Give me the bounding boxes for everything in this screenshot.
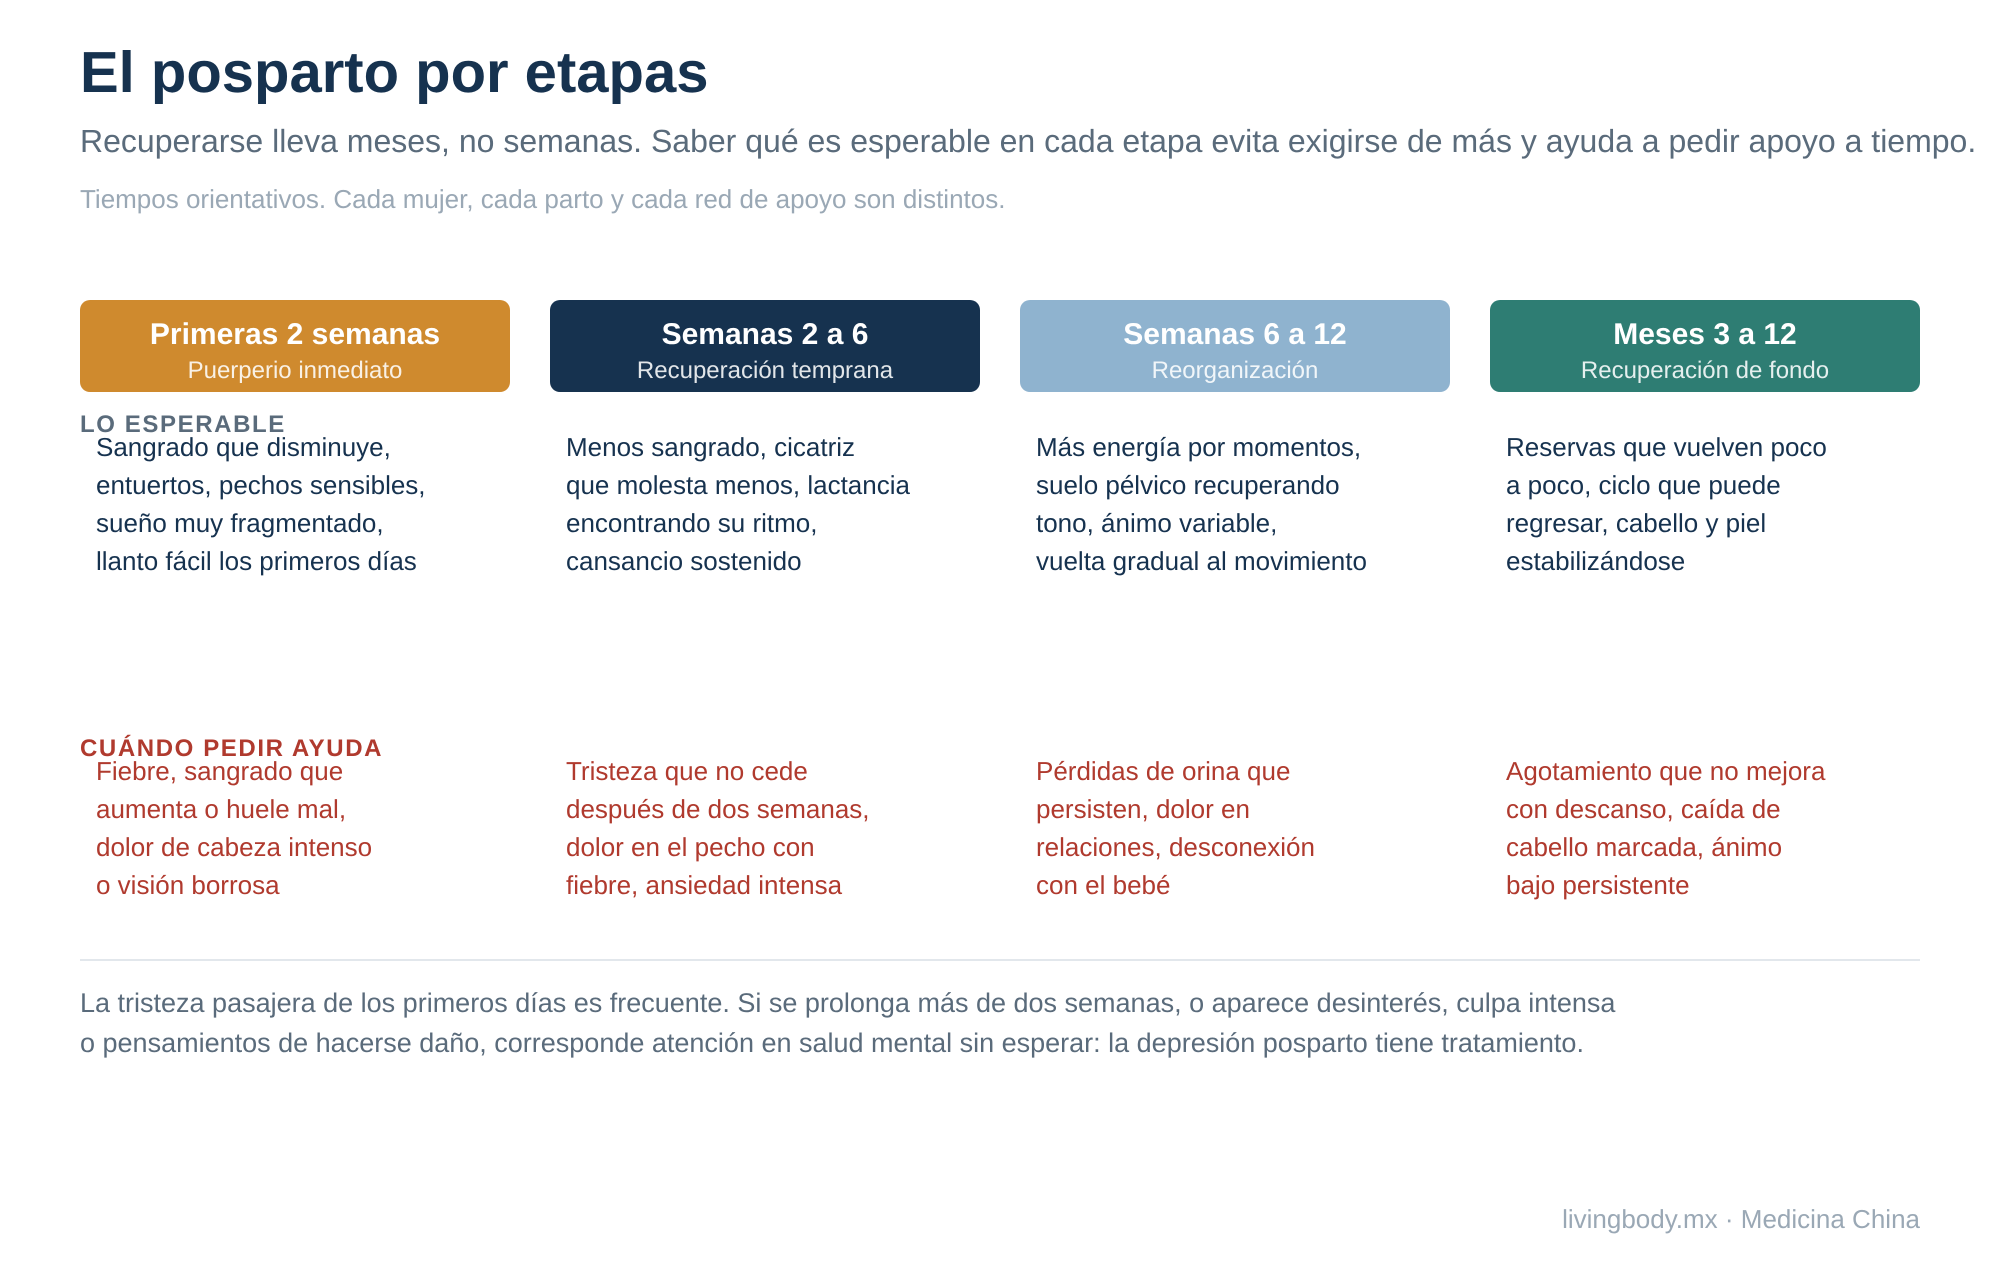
stage header: Semanas 2 a 6: Recuperación temprana [637, 357, 894, 384]
expected text: column 3: suelo pélvico recuperando [1036, 470, 1340, 500]
expected text: column 3: tono, ánimo variable, [1036, 508, 1277, 538]
stage header: Primeras 2 semanas [80, 300, 510, 392]
title: El posparto por etapas [80, 40, 708, 105]
subtitle: Recuperarse lleva meses, no semanas. Saber qué es esperable en cada etapa evita exigirse de más y ayuda a pedir apoyo a tiempo. [80, 123, 1976, 159]
stage header: Meses 3 a 12 [1490, 300, 1920, 392]
warning text: column 1: aumenta o huele mal, [96, 794, 346, 824]
expected text: column 4: a poco, ciclo que puede [1506, 470, 1781, 500]
warning text: column 1 [96, 756, 372, 900]
expected text: column 2: que molesta menos, lactancia [566, 470, 911, 500]
expected text: column 3 [1036, 432, 1367, 576]
stage header: Semanas 2 a 6: Semanas 2 a 6 [662, 318, 868, 351]
stage header: Semanas 6 a 12 [1020, 300, 1450, 392]
warning text: column 3: relaciones, desconexión [1036, 832, 1315, 862]
expected text: column 1: sueño muy fragmentado, [96, 508, 384, 538]
expected text: column 1 [96, 432, 426, 576]
warning text: column 1: dolor de cabeza intenso [96, 832, 372, 862]
stage header: Semanas 2 a 6 [550, 300, 980, 392]
expected text: column 4: regresar, cabello y piel [1506, 508, 1766, 538]
closing note [80, 988, 1616, 1058]
warning text: column 4 [1506, 756, 1826, 900]
stage header: Semanas 6 a 12: Semanas 6 a 12 [1123, 318, 1347, 351]
note: Tiempos orientativos. Cada mujer, cada parto y cada red de apoyo son distintos. [80, 184, 1005, 214]
stage header: Semanas 6 a 12: Reorganización [1152, 357, 1318, 384]
warning text: column 4: Agotamiento que no mejora [1506, 756, 1826, 786]
warning text: column 4: cabello marcada, ánimo [1506, 832, 1782, 862]
section label: cuándo pedir ayuda: CUÁNDO PEDIR AYUDA [80, 734, 383, 762]
stage header: Primeras 2 semanas: Primeras 2 semanas [150, 318, 440, 351]
warning text: column 4: bajo persistente [1506, 870, 1690, 900]
expected text: column 3: Más energía por momentos, [1036, 432, 1361, 462]
expected text: column 2: cansancio sostenido [566, 546, 802, 576]
expected text: column 4: estabilizándose [1506, 546, 1685, 576]
warning text: column 2: dolor en el pecho con [566, 832, 815, 862]
closing note: o pensamientos de hacerse daño, corresponde atención en salud mental sin esperar: la depresión posparto tiene tratamiento. [80, 1028, 1584, 1058]
expected text: column 2: encontrando su ritmo, [566, 508, 817, 538]
stage header: Meses 3 a 12: Meses 3 a 12 [1613, 318, 1797, 351]
warning text: column 1: Fiebre, sangrado que [96, 756, 343, 786]
expected text: column 2 [566, 432, 911, 576]
expected text: column 4: Reservas que vuelven poco [1506, 432, 1827, 462]
closing note: La tristeza pasajera de los primeros días es frecuente. Si se prolonga más de dos semanas, o aparece desinterés, culpa intensa [80, 988, 1616, 1018]
expected text: column 4 [1506, 432, 1827, 576]
stage header: Meses 3 a 12: Recuperación de fondo [1581, 357, 1829, 384]
expected text: column 1: entuertos, pechos sensibles, [96, 470, 426, 500]
warning text: column 2: fiebre, ansiedad intensa [566, 870, 843, 900]
warning text: column 3 [1036, 756, 1315, 900]
stage header: Primeras 2 semanas: Puerperio inmediato [188, 357, 402, 384]
warning text: column 2: Tristeza que no cede [566, 756, 808, 786]
expected text: column 1: llanto fácil los primeros días [96, 546, 417, 576]
warning text: column 4: con descanso, caída de [1506, 794, 1781, 824]
warning text: column 1: o visión borrosa [96, 870, 280, 900]
footer credit: livingbody.mx · Medicina China [1562, 1204, 1921, 1234]
warning text: column 3: con el bebé [1036, 870, 1170, 900]
expected text: column 3: vuelta gradual al movimiento [1036, 546, 1367, 576]
warning text: column 3: persisten, dolor en [1036, 794, 1250, 824]
expected text: column 2: Menos sangrado, cicatriz [566, 432, 855, 462]
section label: lo esperable: LO ESPERABLE [80, 411, 286, 438]
expected text: column 1: Sangrado que disminuye, [96, 432, 391, 462]
warning text: column 2 [566, 756, 870, 900]
warning text: column 3: Pérdidas de orina que [1036, 756, 1290, 786]
warning text: column 2: después de dos semanas, [566, 794, 870, 824]
